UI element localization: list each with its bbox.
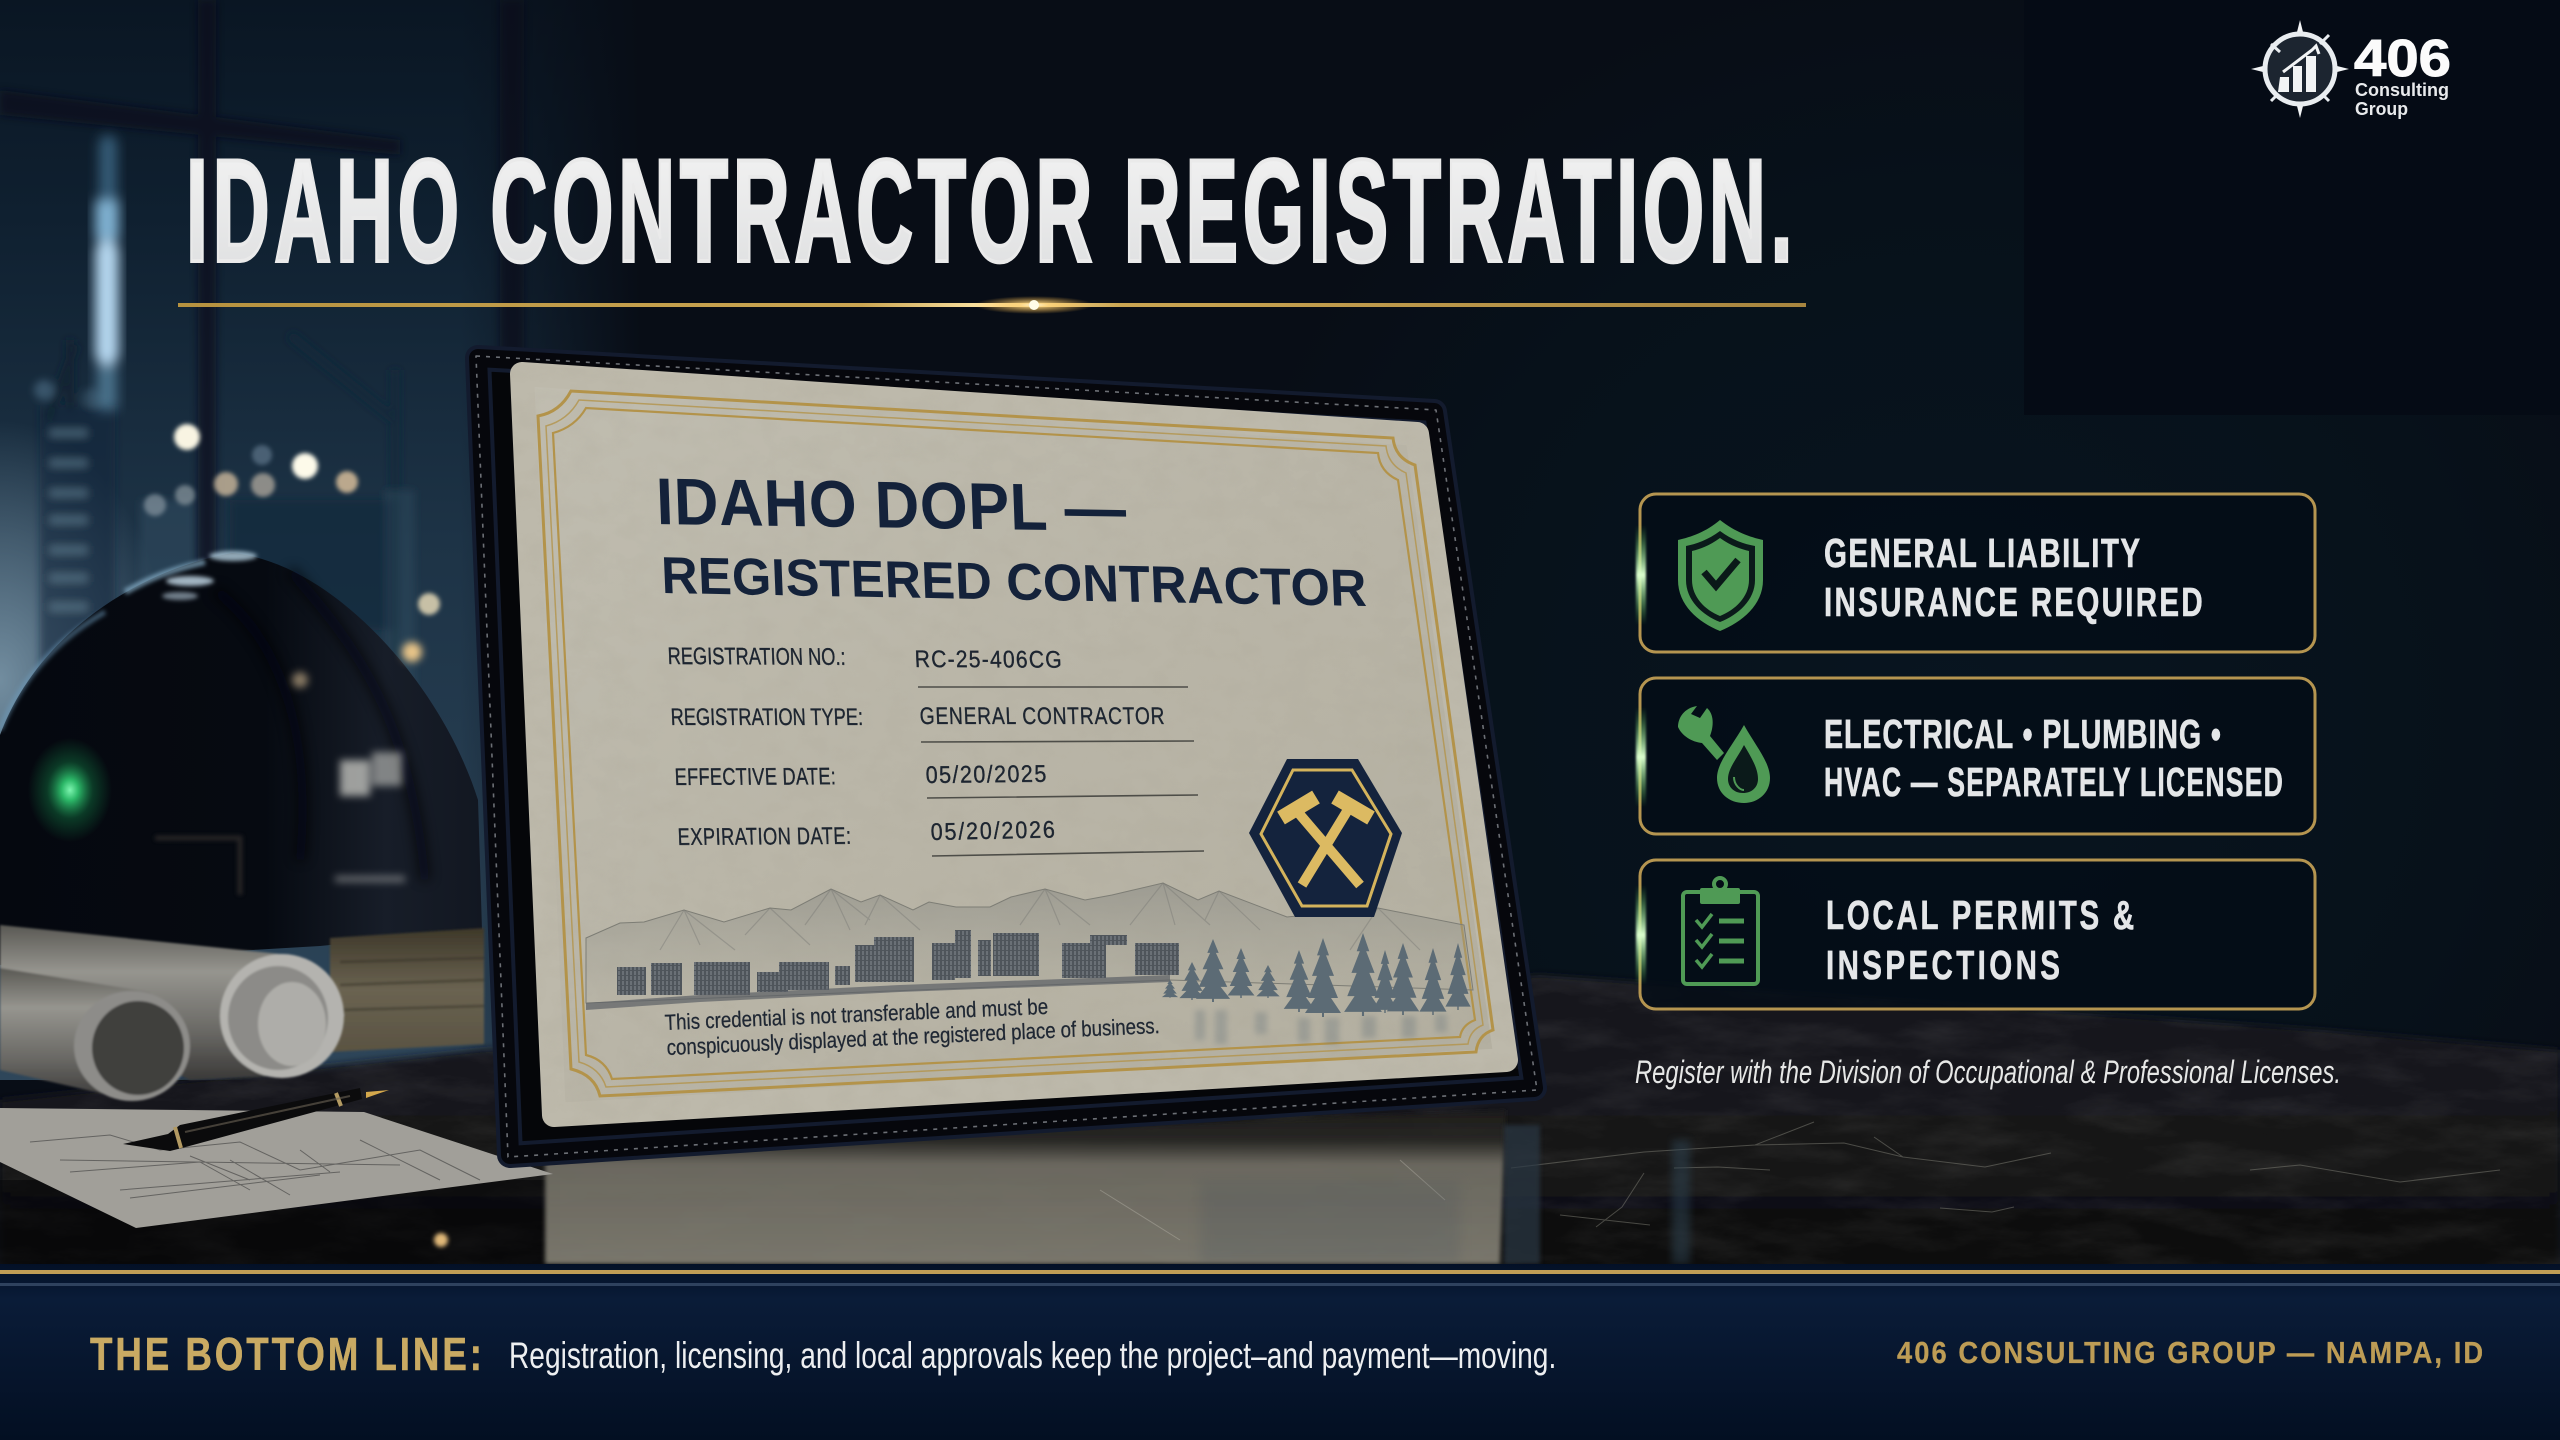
pine trees (1162, 933, 1471, 1017)
hard hat ridge (215, 570, 425, 880)
certificate heading (655, 464, 1368, 617)
certificate landscape engraving (586, 883, 1473, 1044)
certificate fields: RC-25-406CG (914, 646, 1062, 673)
certificate heading: IDAHO DOPL — (655, 464, 1127, 546)
card: electrical plumbing hvac (1636, 678, 2315, 834)
certificate emblem: crossed hammers (1249, 759, 1402, 917)
hard hat blue rim highlights (0, 551, 257, 730)
card: general liability insurance: GENERAL LIABILITY (1824, 530, 2140, 576)
bokeh lights (144, 424, 440, 615)
marble veins (1511, 1122, 2500, 1227)
mountains (586, 883, 1473, 1003)
footer: bottom line label: THE BOTTOM LINE: (90, 1328, 482, 1380)
icon: shield with check (1678, 520, 1763, 631)
certificate gold border (538, 391, 1493, 1096)
checklist cards (1636, 494, 2315, 1009)
background: night window with city (0, 0, 641, 1080)
front roll (0, 968, 186, 1100)
lake with reflections (1195, 1010, 1447, 1044)
city buildings (586, 930, 1179, 1010)
card: local permits and inspections (1636, 860, 2315, 1009)
rear roll (0, 925, 345, 1080)
certificate fields: EXPIRATION DATE: (677, 822, 852, 851)
certificate fields: REGISTRATION TYPE: (670, 704, 864, 731)
table: marble surface (0, 960, 2560, 1270)
title rule with flare (178, 296, 1806, 314)
logo: 406 Consulting Group: 406 (2354, 30, 2451, 88)
certificate fields: 05/20/2025 (925, 760, 1047, 788)
hard hat reflections (292, 642, 422, 882)
certificate field rules (918, 687, 1204, 856)
footer bar (0, 1264, 2560, 1440)
logo: 406 Consulting Group: Consulting (2355, 80, 2449, 100)
card: local permits and inspections: LOCAL PERMITS & (1826, 892, 2134, 938)
hard hat (0, 551, 482, 965)
window mullions (0, 0, 524, 640)
card: general liability insurance (1636, 494, 2315, 652)
card: electrical plumbing hvac: HVAC — SEPARATELY LICENSED (1824, 760, 2283, 805)
certificate fields: GENERAL CONTRACTOR (919, 702, 1165, 730)
green status light (28, 738, 112, 842)
blurred crane and far buildings (140, 335, 415, 740)
light beam on tower (95, 135, 119, 410)
title: IDAHO CONTRACTOR REGISTRATION. (186, 129, 1793, 292)
certificate disclaimer: This credential is not transferable and must be (664, 995, 1049, 1035)
hard hat brim band (155, 838, 240, 895)
footer: company and place: 406 CONSULTING GROUP — NAMPA, ID (1897, 1336, 2483, 1370)
reflection of certificate on table (545, 1110, 1540, 1264)
rolled blueprints (0, 925, 345, 1101)
card: general liability insurance: INSURANCE REQUIRED (1824, 579, 2203, 625)
footer: message: Registration, licensing, and local approvals keep the project–and payment—moving. (509, 1334, 1556, 1376)
certificate paper (500, 350, 1530, 1140)
certificate heading: REGISTERED CONTRACTOR (660, 546, 1368, 617)
certificate fields: REGISTRATION NO.: (667, 643, 846, 671)
floor plan sheet (0, 1108, 553, 1228)
certificate in leather frame (476, 350, 1537, 1157)
logo: 406 Consulting Group: Group (2355, 99, 2408, 119)
card: local permits and inspections: INSPECTIONS (1826, 942, 2060, 988)
logo: 406 Consulting Group (2251, 20, 2451, 119)
icon: clipboard checklist (1683, 878, 1758, 984)
certificate disclaimer: conspicuously displayed at the registered place of business. (666, 1015, 1160, 1060)
leather frame (476, 356, 1537, 1157)
stacked book (330, 928, 484, 1052)
icon: wrench and water drop (1678, 706, 1770, 803)
certificate fields (667, 643, 1165, 851)
logo compass mark (2251, 20, 2349, 118)
certificate fields: EFFECTIVE DATE: (674, 763, 836, 791)
pen (123, 1088, 389, 1151)
blurred tower with lit floors (34, 340, 115, 735)
card: electrical plumbing hvac: ELECTRICAL • PLUMBING • (1824, 712, 2221, 757)
register note: Register with the Division of Occupational & Professional Licenses. (1635, 1055, 2341, 1090)
certificate fields: 05/20/2026 (930, 815, 1055, 845)
